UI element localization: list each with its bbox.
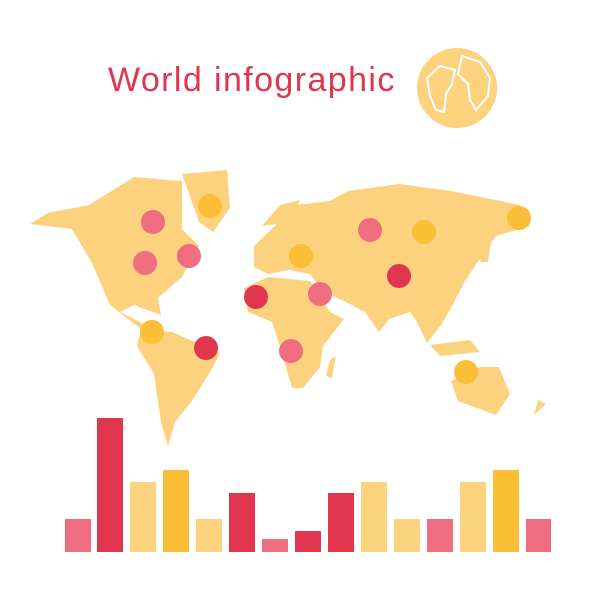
title: World infographic — [108, 61, 396, 99]
data dots — [133, 194, 531, 384]
icon: globe — [417, 48, 497, 128]
bar chart — [65, 418, 551, 552]
world map — [30, 170, 546, 446]
